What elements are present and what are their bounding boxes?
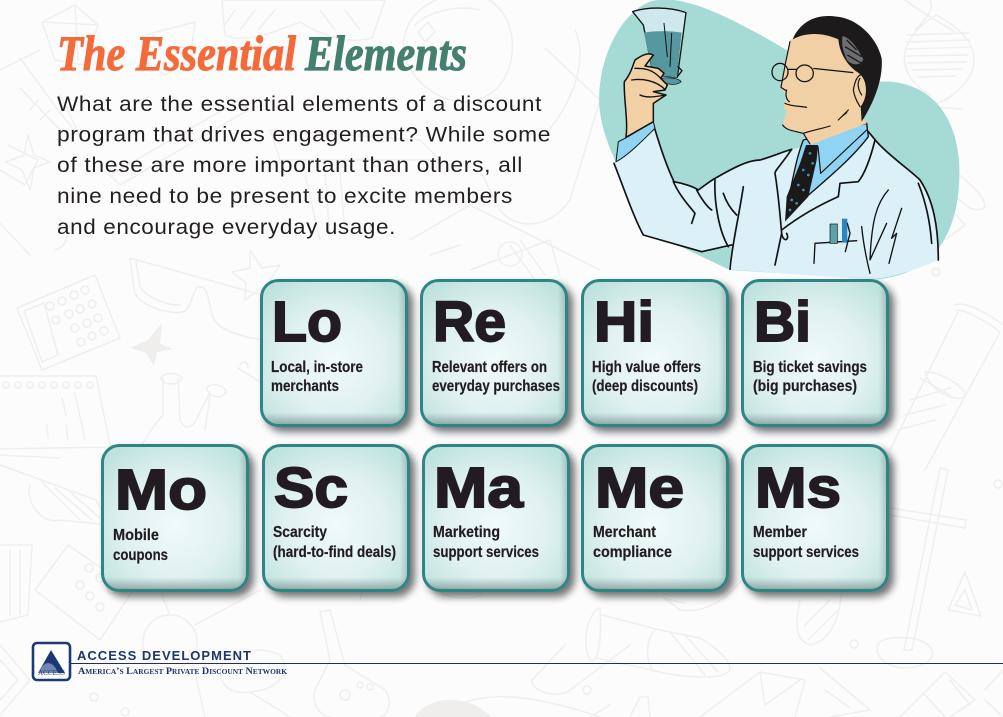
card: Lo: merchants	[271, 378, 339, 395]
card: Ma: Marketing	[433, 524, 500, 541]
doodle: bottom left	[0, 465, 133, 640]
collar fold line	[818, 130, 867, 173]
hand	[624, 54, 667, 137]
card: Re	[422, 280, 566, 426]
card: Ms	[742, 446, 888, 590]
card: Bi: (big purchases)	[753, 378, 857, 395]
title: green part: Elements	[304, 25, 467, 81]
lab coat	[614, 124, 938, 279]
card: Sc: Sc	[274, 456, 348, 520]
card: Ma	[424, 446, 568, 590]
intro text: What are the essential elements of a discount	[57, 92, 542, 116]
card: Lo: Lo	[272, 290, 342, 354]
card: Ms: Member	[753, 524, 807, 541]
doodle: goggles top	[222, 0, 385, 40]
card: Me	[582, 446, 728, 590]
card: Lo	[262, 280, 406, 426]
pens in pocket	[830, 219, 850, 252]
card: Sc: Scarcity	[273, 524, 327, 541]
glasses	[772, 63, 853, 82]
doodle: bottom tube and leaf	[532, 565, 842, 694]
card: Me: Merchant	[593, 524, 656, 541]
card: Bi: Bi	[754, 290, 811, 354]
card: Re: Relevant offers on	[432, 359, 547, 376]
card: Re: everyday purchases	[432, 378, 560, 395]
title	[57, 25, 467, 81]
hair	[793, 16, 882, 122]
logo: Access Development: ACCESS	[38, 669, 65, 677]
doodle: bottom centre lab	[90, 555, 650, 717]
face ink lines	[781, 42, 867, 144]
doodle: star	[130, 323, 173, 366]
card: Ma: support services	[433, 544, 539, 561]
tagline: America’s Largest Private Discount Network	[78, 667, 288, 677]
doodle: test tube right	[890, 304, 1003, 470]
scientist illustration	[599, 0, 959, 279]
card: Mo	[102, 446, 248, 590]
card: Sc: (hard-to-find deals)	[273, 544, 396, 561]
title: orange part: The Essential	[57, 25, 296, 81]
card: Hi: High value offers	[592, 359, 701, 376]
card: Mo: Mobile	[113, 527, 159, 544]
card: Hi	[582, 280, 728, 426]
card: Bi: Big ticket savings	[753, 359, 867, 376]
card: Ms: Ms	[755, 456, 841, 520]
teal blob	[599, 0, 959, 279]
card: Sc	[264, 446, 408, 590]
intro text: and encourage everyday usage.	[57, 215, 396, 239]
fingers	[632, 67, 682, 97]
card: Hi: (deep discounts)	[592, 378, 698, 395]
card: Lo: Local, in-store	[271, 359, 363, 376]
doodle: calculator bottom	[0, 564, 116, 715]
card: Bi	[742, 280, 888, 426]
beaker	[633, 8, 686, 84]
card: Hi: Hi	[594, 290, 654, 354]
card: Mo: coupons	[113, 547, 168, 564]
doodle: notebook	[0, 376, 110, 458]
tie	[785, 145, 818, 222]
intro text	[57, 92, 551, 239]
company name: ACCESS DEVELOPMENT	[77, 648, 251, 663]
doodle: DNA	[904, 0, 985, 276]
card: Me: compliance	[593, 544, 672, 561]
face and neck	[781, 32, 868, 145]
doodle: calculator	[17, 275, 120, 370]
intro text: of these are more important than others, all	[57, 153, 523, 177]
intro text: nine need to be present to excite members	[57, 184, 513, 208]
doodle: magnifier ring	[403, 0, 512, 101]
doodle: top-left crystals	[0, 5, 195, 140]
doodle: test tubes and pencil	[0, 100, 440, 255]
doodle: right stand	[877, 468, 981, 668]
doodle: star centre	[232, 250, 280, 300]
doodle: goggles	[130, 258, 262, 340]
doodle: dropper and tube right of text	[410, 30, 600, 280]
shirt collar	[788, 123, 868, 200]
doodle: bottom crystals	[700, 668, 1003, 717]
card: Re: Re	[433, 290, 506, 354]
card: Ma: Ma	[434, 456, 524, 520]
doodle: flasks	[140, 362, 260, 448]
shirt cuff	[616, 122, 655, 162]
logo: Access Development	[33, 643, 70, 680]
footer rule	[71, 663, 1003, 664]
card: Me: Me	[595, 456, 684, 520]
card: Ms: support services	[753, 544, 859, 561]
card: Mo: Mo	[115, 458, 207, 522]
element cards	[102, 280, 888, 590]
intro text: program that drives engagement? While some	[57, 122, 551, 146]
